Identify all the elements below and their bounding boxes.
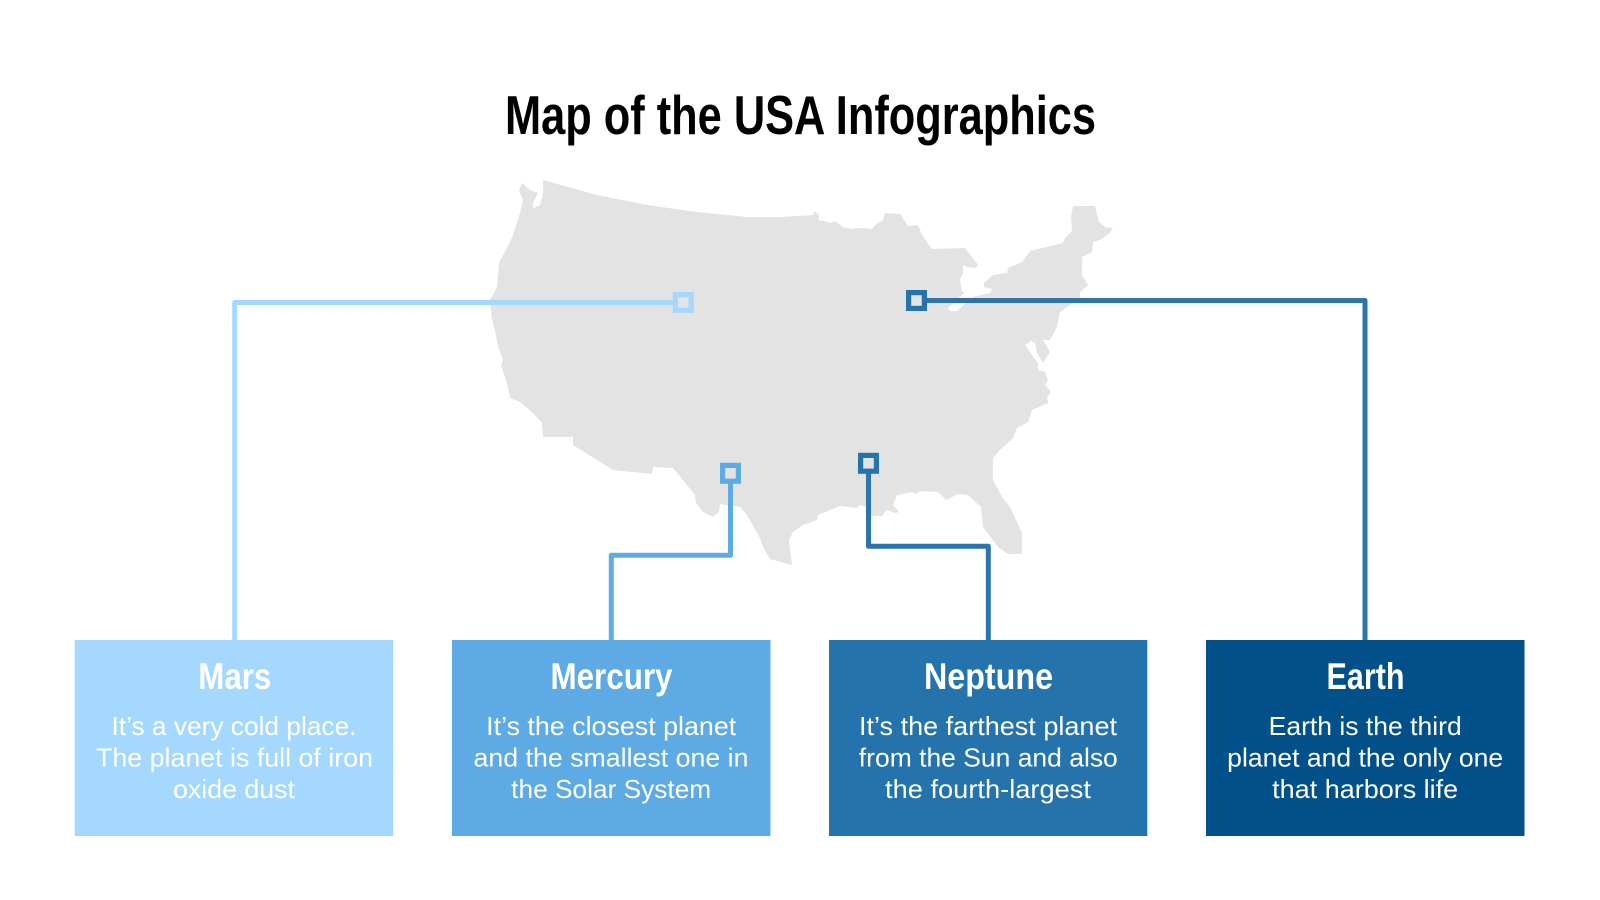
heading: Earth: Earth xyxy=(1326,656,1404,697)
heading: Neptune: Neptune xyxy=(924,656,1053,697)
heading: Mars: Mars xyxy=(198,656,271,697)
text: Mars description: It’s a very cold place. xyxy=(112,711,356,741)
connector: Mercury xyxy=(611,465,738,640)
text: Mercury description: and the smallest one in xyxy=(474,742,748,772)
panel: Neptune xyxy=(829,640,1147,836)
connector: Earth xyxy=(909,293,1365,640)
connector: Mars xyxy=(235,295,691,640)
connector line: Mercury xyxy=(611,482,730,640)
marker: Earth xyxy=(909,293,924,308)
panel: Mercury xyxy=(452,640,770,836)
text: Mercury description xyxy=(474,711,748,804)
map: contiguous USA silhouette xyxy=(490,180,1113,565)
text: Mars description: The planet is full of iron xyxy=(96,742,373,772)
title: Map of the USA Infographics xyxy=(505,84,1096,146)
heading: Mercury: Mercury xyxy=(550,656,673,697)
text: Mercury description: the Solar System xyxy=(511,774,711,804)
text: Mars description xyxy=(96,711,373,804)
marker: Mars xyxy=(675,295,691,310)
text: Mercury description: It’s the closest planet xyxy=(486,711,737,741)
marker: Mercury xyxy=(723,465,738,481)
text: Earth description xyxy=(1227,711,1503,804)
text: Neptune description xyxy=(859,711,1118,804)
text: Neptune description: from the Sun and also xyxy=(859,742,1118,772)
text: Earth description: Earth is the third xyxy=(1269,711,1462,741)
text: Earth description: planet and the only one xyxy=(1227,742,1503,772)
panel: Mars xyxy=(75,640,393,836)
connector line: Earth xyxy=(925,300,1365,640)
connector: Neptune xyxy=(861,455,988,640)
panel: Earth xyxy=(1206,640,1524,836)
text: Mars description: oxide dust xyxy=(173,774,296,804)
connector line: Mars xyxy=(235,302,676,640)
connector line: Neptune xyxy=(868,472,988,640)
text: Earth description: that harbors life xyxy=(1272,774,1458,804)
text: Neptune description: It’s the farthest planet xyxy=(859,711,1118,741)
marker: Neptune xyxy=(861,455,876,471)
text: Neptune description: the fourth-largest xyxy=(885,774,1092,804)
